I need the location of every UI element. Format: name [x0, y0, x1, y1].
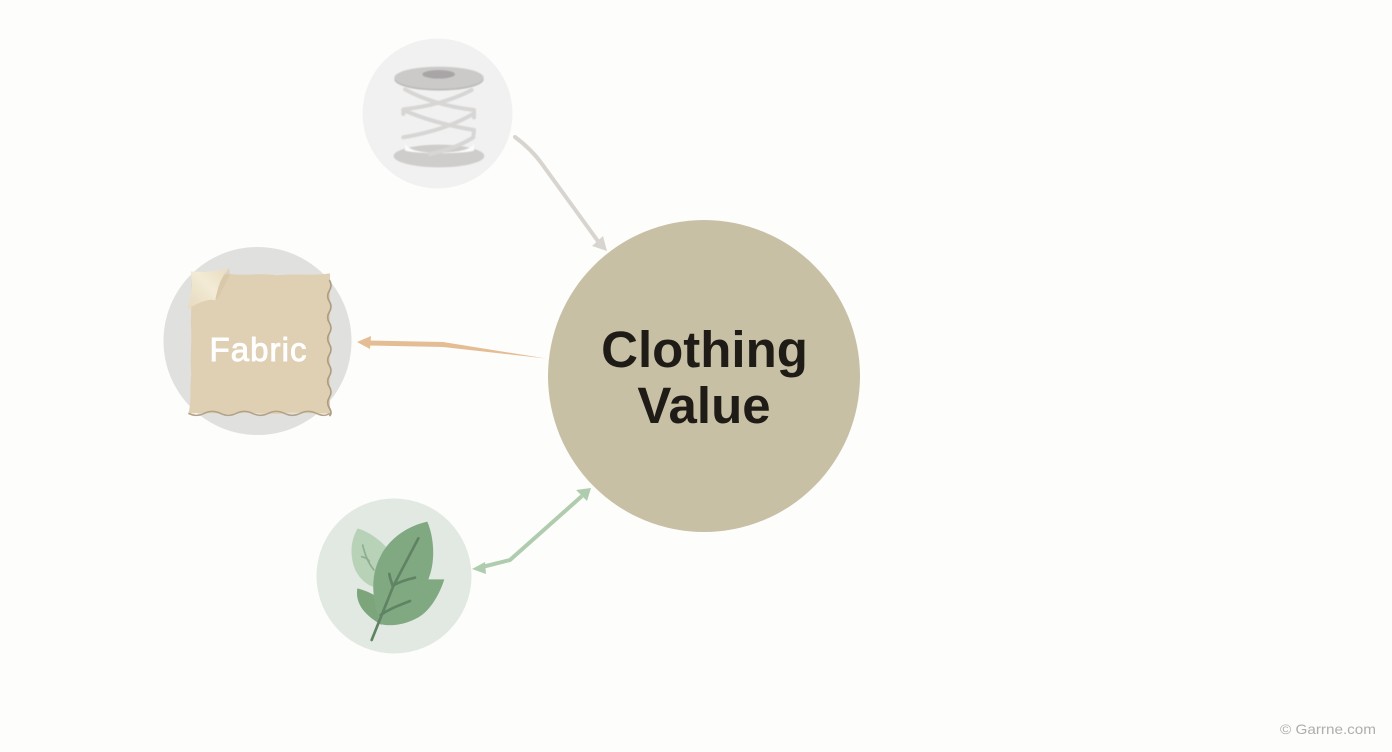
- fabric background circle: [164, 247, 352, 435]
- arrow: clothing value to fabric: [357, 336, 546, 358]
- central heading: Value: [637, 377, 771, 434]
- folded corner: [187, 268, 229, 309]
- icon: fabric swatch: [187, 268, 331, 416]
- fabric label: Fabric: [210, 331, 306, 368]
- frayed bottom edge: [188, 411, 330, 415]
- central heading: Clothing: [601, 321, 808, 378]
- panel: fabric node: [164, 247, 352, 435]
- panel: thread spool node: [362, 38, 512, 188]
- panel: clothing value central circle: [548, 220, 860, 532]
- central heading: [601, 321, 808, 434]
- arrow: leaf and clothing value double-headed: [472, 488, 591, 574]
- icon: leaves: [351, 522, 444, 640]
- central circle: [548, 220, 860, 532]
- spool background circle: [362, 38, 512, 188]
- watermark: © Garrne.com: [1280, 721, 1376, 737]
- frayed right edge: [328, 280, 331, 416]
- icon: thread spool: [394, 67, 484, 167]
- arrow: spool to clothing value: [515, 137, 607, 251]
- panel: leaf node: [316, 498, 472, 654]
- leaf background circle: [316, 498, 472, 654]
